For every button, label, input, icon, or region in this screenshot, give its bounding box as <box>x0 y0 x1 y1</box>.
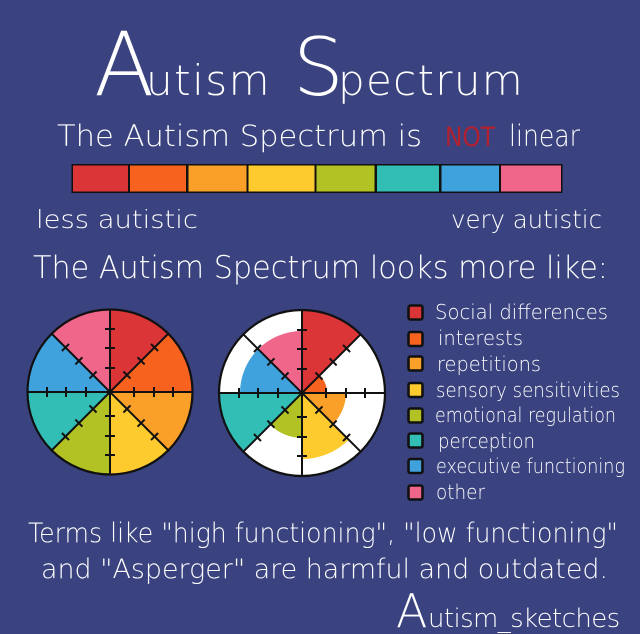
title: S <box>293 21 344 114</box>
legend item: other: other <box>436 480 486 504</box>
closing statement: and "Asperger" are harmful and outdated. <box>41 554 608 585</box>
legend item: repetitions: repetitions <box>437 352 541 376</box>
signature: utism_sketches <box>428 604 620 634</box>
label: very autistic: very autistic <box>451 205 602 234</box>
legend item: sensory sensitivities: sensory sensitivities <box>436 378 620 402</box>
legend item: perception: perception <box>438 429 535 453</box>
legend item: other <box>408 480 486 504</box>
subtitle: not linear <box>57 119 580 153</box>
subtitle: not linear: NOT <box>445 122 495 153</box>
label: less autistic: less autistic <box>36 205 198 234</box>
chart: full colour wheel <box>28 310 192 474</box>
closing statement <box>28 518 618 585</box>
subtitle: not linear: The Autism Spectrum is <box>57 119 422 153</box>
title: A <box>94 13 154 116</box>
legend item: social differences: Social differences <box>435 300 608 324</box>
title: utism <box>146 56 271 105</box>
legend item: emotional regulation: emotional regulation <box>435 403 616 427</box>
legend <box>408 300 625 504</box>
subtitle: not linear: linear <box>509 119 580 153</box>
title: pectrum <box>338 56 524 105</box>
heading: looks more like: The Autism Spectrum looks more like: <box>33 250 608 286</box>
title <box>94 13 524 116</box>
linear spectrum bar <box>72 164 562 193</box>
chart: uneven profile wheel <box>219 310 385 476</box>
legend item: interests: interests <box>438 326 523 350</box>
